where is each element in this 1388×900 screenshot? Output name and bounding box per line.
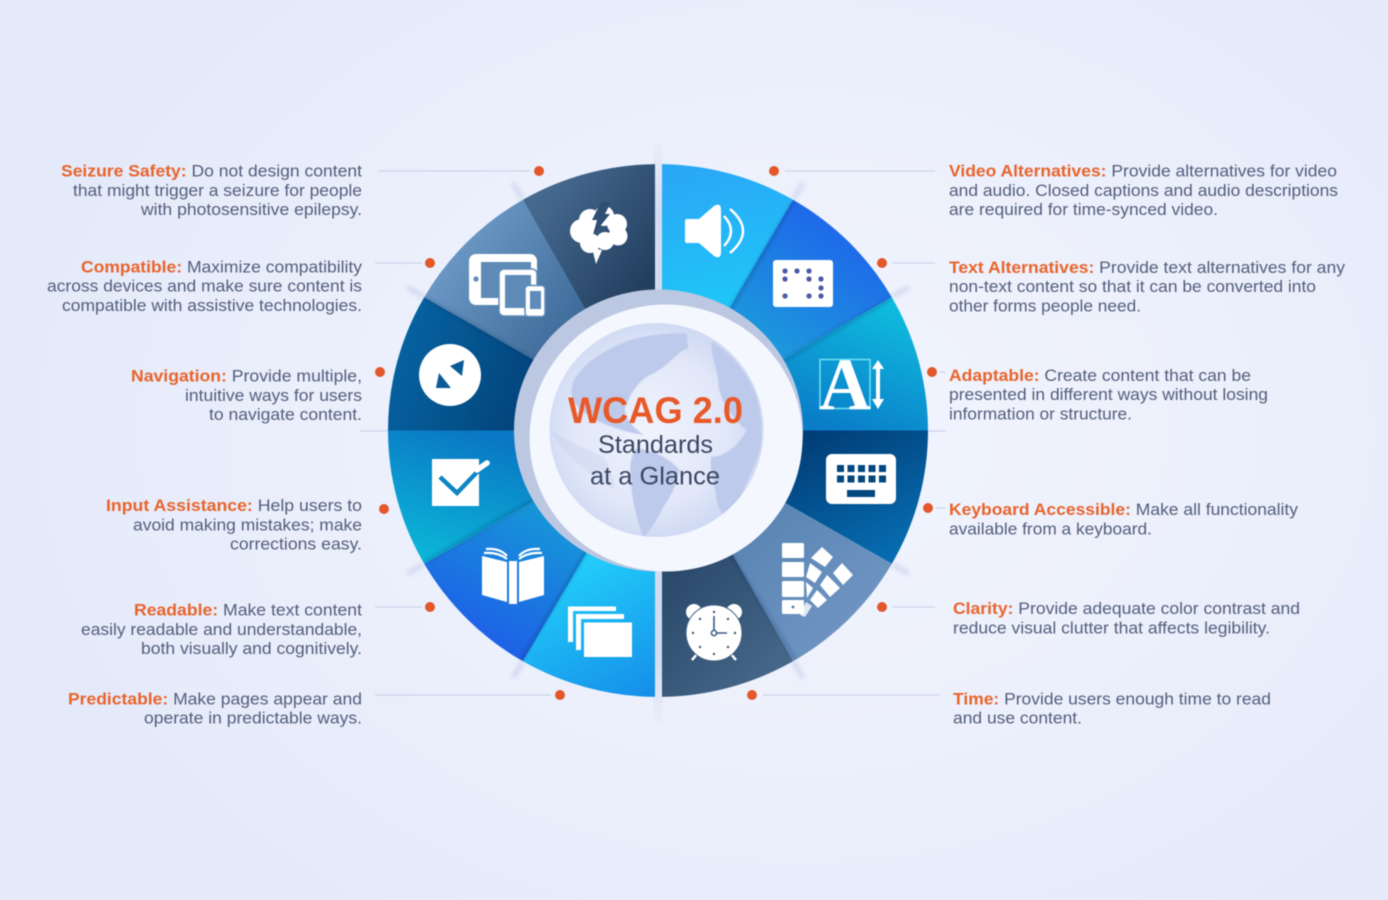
icon: brain with lightning bolt	[570, 202, 628, 264]
text: compatible: compatible with assistive technologies.	[62, 297, 362, 315]
hub title: WCAG 2.0	[568, 390, 743, 431]
segment: predictable	[523, 430, 655, 697]
hub title	[568, 390, 743, 490]
text: navigation: intuitive ways for users	[185, 387, 362, 405]
icon: braille dots	[773, 260, 833, 307]
segment: navigation	[388, 297, 658, 430]
text: video alternatives	[949, 162, 1338, 219]
hub title: Standards	[598, 431, 713, 459]
text: navigation	[131, 368, 362, 424]
text: clarity: reduce visual clutter that affects legibility.	[953, 620, 1270, 638]
text: input assistance: avoid making mistakes; make	[133, 516, 362, 534]
text: time	[953, 690, 1271, 728]
text: adaptable: information or structure.	[949, 406, 1132, 424]
text: video alternatives: are required for time-synced video.	[949, 201, 1218, 219]
icon: navigation compass	[419, 344, 481, 406]
text: text alternatives: other forms people need.	[949, 298, 1141, 316]
text: clarity: Clarity: Provide adequate color contrast and	[953, 600, 1300, 618]
text: readable	[81, 602, 362, 658]
wheel segments	[388, 164, 928, 697]
segment: seizure safety	[523, 164, 655, 430]
segment: readable	[424, 430, 658, 661]
text: clarity	[953, 600, 1300, 638]
segment: compatible	[424, 200, 658, 430]
segment: text alternatives	[658, 200, 892, 430]
text: predictable: operate in predictable ways.	[144, 710, 362, 728]
centre hub	[514, 290, 803, 572]
text: keyboard accessible	[949, 501, 1299, 538]
callout dots	[375, 166, 937, 700]
text: input assistance: corrections easy.	[230, 536, 362, 554]
globe	[550, 323, 764, 537]
hub title: at a Glance	[590, 462, 720, 490]
segment: adaptable	[658, 297, 928, 430]
segment: video alternatives	[662, 164, 793, 430]
infographic canvas	[47, 163, 1346, 728]
icon: open book	[482, 549, 544, 604]
text: video alternatives: Video Alternatives: Provide alternatives for video	[949, 162, 1337, 180]
text: text alternatives: Text Alternatives: Provide text alternatives for any	[949, 259, 1346, 277]
text: input assistance	[106, 497, 362, 554]
text: seizure safety: Seizure Safety: Do not design content	[61, 162, 362, 180]
hub shadow ring	[514, 290, 803, 572]
text: predictable	[68, 690, 362, 728]
segment: keyboard accessible	[658, 430, 928, 564]
text: adaptable: presented in different ways without losing	[949, 386, 1268, 404]
hub white ring	[530, 304, 802, 572]
text: seizure safety: that might trigger a seizure for people	[73, 182, 362, 200]
icon: checkbox with pencil	[432, 459, 487, 506]
text: input assistance: Input Assistance: Help users to	[106, 497, 362, 515]
text: seizure safety: with photosensitive epilepsy.	[140, 201, 362, 219]
text: compatible: Compatible: Maximize compatibility	[81, 258, 363, 276]
segment: clarity	[658, 430, 892, 661]
text: seizure safety	[61, 162, 362, 219]
text: keyboard accessible: available from a keyboard.	[949, 520, 1152, 538]
text: video alternatives: and audio. Closed captions and audio descriptions	[949, 182, 1338, 200]
icon: responsive devices	[469, 254, 545, 316]
icon: stacked windows	[568, 606, 632, 657]
text: navigation: Navigation: Provide multiple,	[131, 368, 362, 386]
text: time: and use content.	[953, 710, 1082, 728]
callout leader lines	[375, 171, 946, 695]
segment seam shadows	[425, 201, 890, 660]
text: compatible: across devices and make sure content is	[47, 278, 362, 296]
icon: speaker	[685, 205, 743, 257]
text: keyboard accessible: Keyboard Accessible: Make all functionality	[949, 501, 1299, 519]
icon: keyboard	[826, 454, 896, 504]
text: text alternatives	[949, 259, 1346, 316]
text: readable: Readable: Make text content	[134, 602, 362, 620]
segment: input assistance	[388, 430, 658, 564]
icon: alarm clock	[686, 604, 742, 661]
text: adaptable	[949, 367, 1268, 424]
text: text alternatives: non-text content so that it can be converted into	[949, 278, 1316, 296]
text: readable: easily readable and understandable,	[81, 621, 362, 639]
text: compatible	[47, 258, 363, 315]
text: adaptable: Adaptable: Create content that can be	[949, 367, 1251, 385]
wheel axis glow	[360, 138, 946, 728]
icon: colour swatch fan	[782, 543, 853, 617]
icon: resizable letter A: A	[819, 344, 871, 426]
text: predictable: Predictable: Make pages appear and	[68, 690, 362, 708]
text: navigation: to navigate content.	[209, 406, 362, 424]
text: readable: both visually and cognitively.	[141, 640, 362, 658]
text: time: Time: Provide users enough time to read	[953, 690, 1271, 708]
segment: time	[662, 430, 793, 697]
